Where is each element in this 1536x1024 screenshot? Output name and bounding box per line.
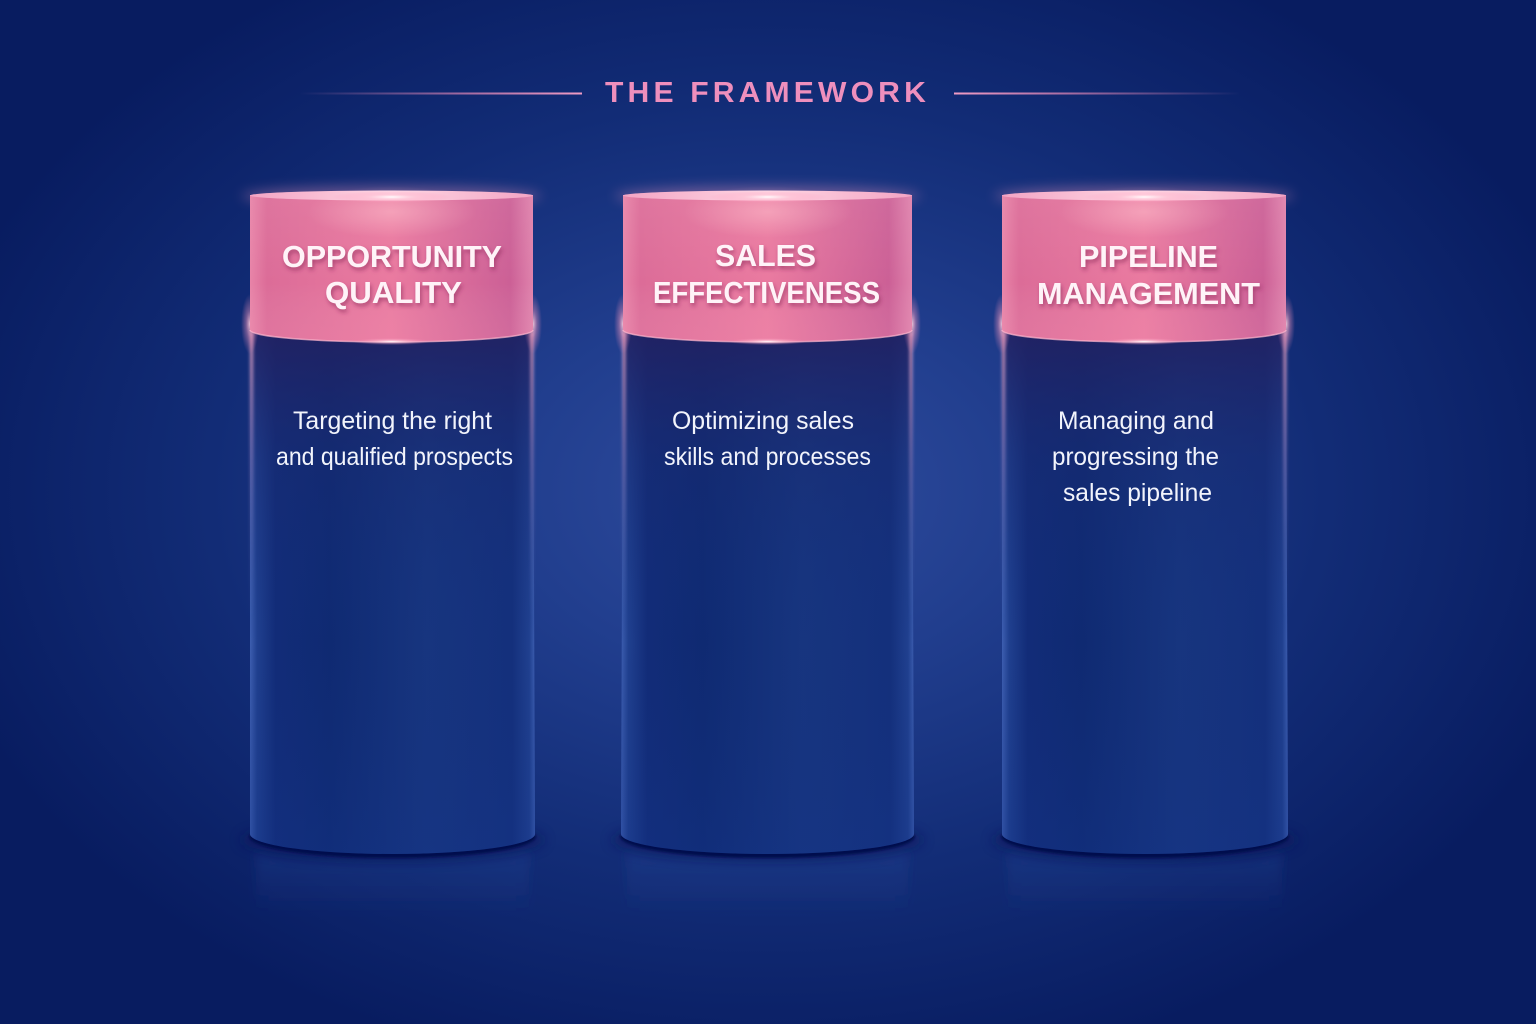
cylinder body bbox=[612, 325, 924, 860]
heading: MANAGEMENT bbox=[1037, 276, 1260, 311]
heading: PIPELINE bbox=[1079, 239, 1218, 274]
floor reflection bbox=[256, 850, 529, 915]
heading bbox=[653, 238, 880, 310]
floor reflection bbox=[627, 850, 908, 915]
pink band bbox=[993, 186, 1295, 354]
panel: pipeline management bbox=[992, 186, 1298, 915]
description bbox=[276, 407, 513, 471]
floor reflection bbox=[1008, 850, 1282, 915]
description bbox=[1052, 407, 1219, 507]
cylinder body bbox=[240, 325, 544, 860]
heading: EFFECTIVENESS bbox=[653, 275, 880, 310]
panel: sales effectiveness bbox=[612, 186, 924, 915]
description bbox=[664, 407, 871, 471]
description: Targeting the right bbox=[293, 407, 492, 435]
description: progressing the bbox=[1052, 443, 1219, 471]
cylinder body bbox=[992, 325, 1298, 860]
heading: OPPORTUNITY bbox=[282, 239, 502, 274]
heading bbox=[282, 239, 502, 310]
heading: QUALITY bbox=[325, 275, 462, 310]
heading: SALES bbox=[715, 238, 816, 273]
description: skills and processes bbox=[664, 443, 871, 471]
heading bbox=[1037, 239, 1260, 311]
panel: opportunity quality bbox=[240, 186, 544, 915]
pink band bbox=[241, 186, 542, 354]
description: sales pipeline bbox=[1063, 479, 1212, 507]
title: the framework: THE FRAMEWORK bbox=[605, 77, 930, 109]
description: Optimizing sales bbox=[672, 407, 854, 435]
pink band bbox=[614, 186, 921, 354]
description: Managing and bbox=[1058, 407, 1214, 435]
description: and qualified prospects bbox=[276, 443, 513, 471]
